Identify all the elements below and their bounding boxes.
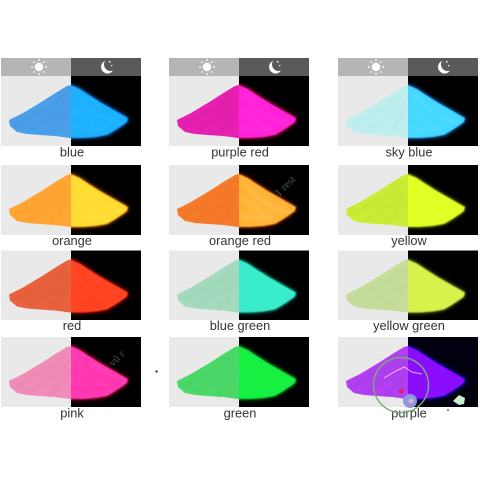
label: green <box>224 406 256 420</box>
stamp ring <box>374 358 428 412</box>
stamp heart <box>399 389 403 393</box>
panel: day and night icon header, column 2 <box>169 58 309 76</box>
panel: day and night icon header, column 3 <box>338 58 478 76</box>
stamp mountain line <box>384 367 422 378</box>
icon: moon <box>438 61 450 73</box>
panel: orange red <box>169 165 309 248</box>
watermark: vũ r <box>107 348 128 369</box>
stamp leaf <box>453 395 465 405</box>
icon: sun <box>199 59 215 75</box>
watermark stamp <box>374 358 465 412</box>
panel: yellow green <box>338 250 478 333</box>
watermark: 1 rest <box>273 174 298 199</box>
stray mark <box>447 409 449 411</box>
panel: orange <box>1 165 141 248</box>
label: yellow <box>391 233 428 248</box>
label: purple red <box>211 144 269 160</box>
label: orange red <box>209 233 271 248</box>
panel: blue green <box>169 250 309 333</box>
stray dot <box>155 370 158 373</box>
label: blue green <box>210 318 270 333</box>
label: pink <box>60 406 84 420</box>
panel: blue <box>1 76 141 160</box>
label: blue <box>60 144 84 160</box>
panel: red <box>1 250 141 333</box>
icon: sun <box>31 59 47 75</box>
icon: moon <box>269 61 281 73</box>
icon: sun <box>368 59 384 75</box>
stamp flower <box>403 394 417 408</box>
panel: purple red <box>169 76 309 160</box>
label: yellow green <box>373 318 445 333</box>
panel: purple <box>338 337 478 420</box>
label: purple <box>391 406 427 420</box>
label: sky blue <box>386 144 432 160</box>
panel: day and night icon header, column 1 <box>1 58 141 76</box>
panel: sky blue <box>338 76 478 160</box>
panel: green <box>169 337 309 420</box>
panel: yellow <box>338 165 478 248</box>
icon: moon <box>101 61 113 73</box>
panel: pink <box>1 337 141 420</box>
label: red <box>63 318 81 333</box>
label: orange <box>52 233 92 248</box>
flower center <box>409 399 413 403</box>
